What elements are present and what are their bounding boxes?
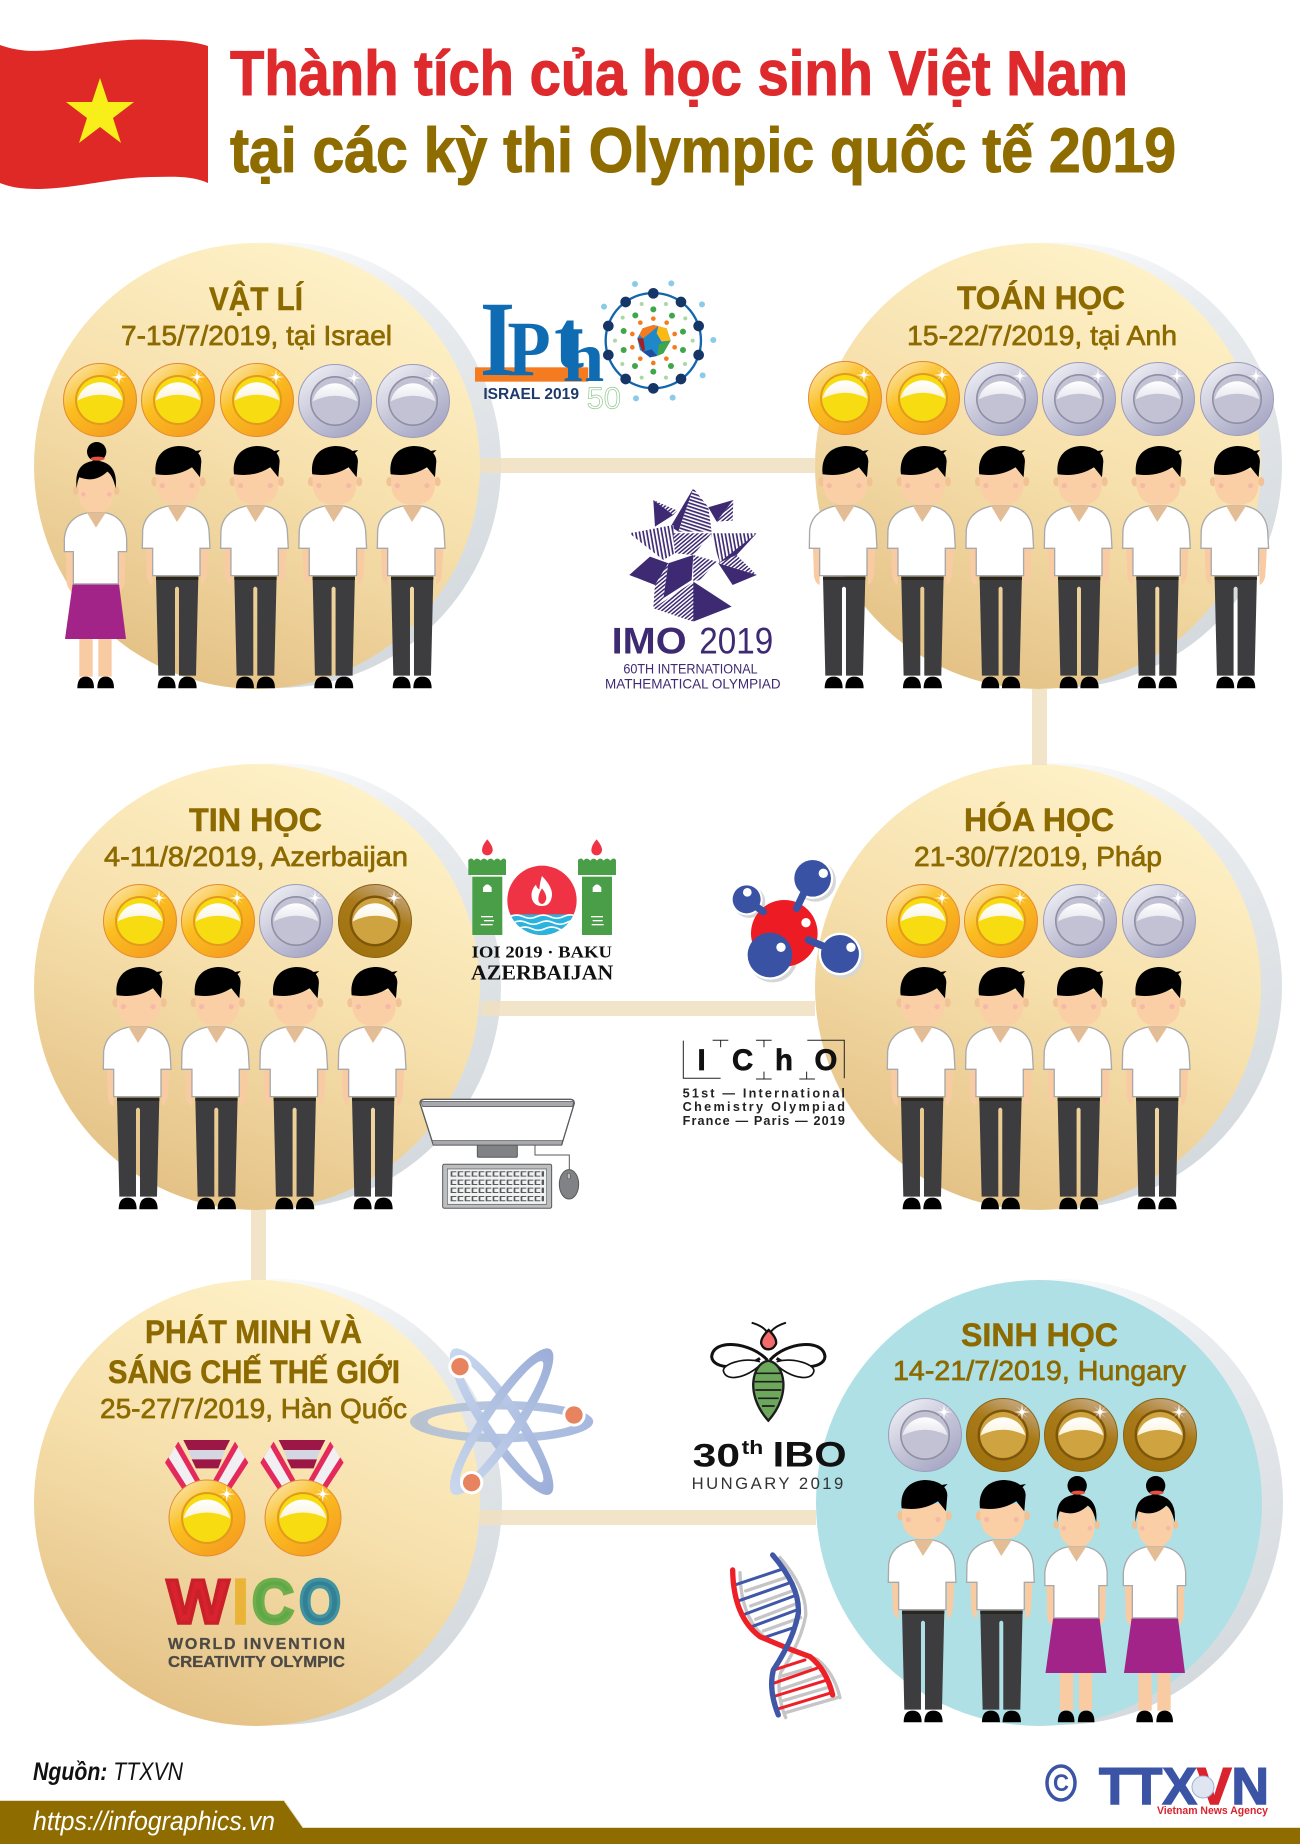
logo: IChO: France — Paris — 2019 [683,1114,845,1128]
heading: Vật lí: VẬT LÍ [209,281,304,317]
logo: IBO Hungary [692,1323,847,1493]
logo: IOI 2019 Baku: IOI 2019 · BAKU [472,943,612,962]
logo: IChO [683,1040,845,1128]
logo: IMO 2019: 60TH INTERNATIONAL [623,660,758,676]
students: Tin học [103,967,406,1209]
flag of Vietnam [0,39,208,189]
students: Vật lí [64,442,445,688]
logo: TTXVN: C [1053,1770,1069,1797]
students: Toán học [809,446,1269,688]
logo: IMO 2019: MATHEMATICAL OLYMPIAD [605,675,781,691]
logo: WICO: CREATIVITY OLYMPIC [168,1654,345,1671]
logo: IOI 2019 Baku: AZERBAIJAN [471,960,614,984]
logo: WICO: I [233,1568,248,1637]
medals: Vật lí [64,364,450,438]
medals: Toán học [808,362,1274,436]
logo: IMO 2019 [605,488,781,691]
logo: IPhO: 50 [587,381,621,415]
logo: IPhO [475,280,716,415]
connectors between panels [251,458,1047,1525]
heading: Phát minh và sáng chế thế giới: SÁNG CHẾ THẾ GIỚI [108,1354,400,1390]
icon: atom [410,1338,593,1506]
panel: Sinh học [816,1279,1283,1726]
heading: Sinh học: SINH HỌC [961,1317,1118,1353]
medals: Sinh học [888,1398,1196,1472]
website url: https://infographics.vn [33,1806,275,1836]
heading: Phát minh và sáng chế thế giới [108,1314,400,1390]
medals: Tin học [104,884,412,958]
logo: IBO Hungary: th [742,1438,763,1459]
date: Vật lí: 7-15/7/2019, tại Israel [121,320,392,351]
logo: IOI 2019 Baku [468,839,616,984]
logo: IBO Hungary: HUNGARY 2019 [692,1474,843,1493]
panel: Tin học [34,763,501,1210]
title [230,39,1176,186]
logo: IChO: h [775,1044,793,1077]
icon: DNA helix [733,1555,840,1718]
logo: IPhO: ISRAEL 2019 [483,386,579,403]
panel: Hóa học [815,763,1282,1210]
icon: computer [420,1099,579,1208]
logo: IPhO: P [507,305,551,392]
heading: Toán học: TOÁN HỌC [957,280,1125,316]
logo: TTXVN: TTXVN [1099,1758,1269,1816]
date: Sinh học: 14-21/7/2019, Hungary [893,1355,1186,1386]
students: Sinh học [888,1476,1186,1722]
medals: Hóa học [886,884,1196,958]
panel: Phát minh và sáng chế thế giới [34,1279,502,1726]
logo: IPhO: h [563,318,604,397]
logo: TTXVN: Vietnam News Agency [1157,1805,1269,1817]
title: tại các kỳ thi Olympic quốc tế 2019 [230,116,1176,186]
logo: IPhO: t [554,294,584,386]
date: Hóa học: 21-30/7/2019, Pháp [914,841,1162,872]
logo: IChO: C [732,1044,753,1077]
logo: IChO: Chemistry Olympiad [683,1100,845,1114]
logo: WICO: WORLD INVENTION [168,1636,345,1653]
logo: IChO: 51st — International [683,1086,845,1100]
logo: IPhO: I [480,281,515,399]
heading: Phát minh và sáng chế thế giới: PHÁT MINH VÀ [145,1314,362,1350]
heading: Tin học: TIN HỌC [189,802,322,838]
heading: Hóa học: HÓA HỌC [964,802,1114,838]
students: Hóa học [887,967,1190,1209]
date: Tin học: 4-11/8/2019, Azerbaijan [104,841,408,872]
date: Toán học: 15-22/7/2019, tại Anh [907,320,1177,351]
footer band [0,1800,1300,1844]
logo: IMO 2019: 2019 [699,620,773,661]
title: Thành tích của học sinh Việt Nam [230,39,1128,109]
panel: Vật lí [34,242,501,689]
logo: WICO: O [299,1568,341,1637]
logo: IChO: I [698,1044,706,1077]
logo: IChO: O [815,1044,837,1077]
logo: WICO: C [252,1568,294,1637]
icon: molecule [731,858,864,982]
logo: WICO [167,1568,345,1671]
logo: WICO: W [167,1568,229,1637]
medals with ribbons [165,1440,344,1556]
logo: IMO 2019: IMO [612,620,687,661]
source note: Nguồn: TTXVN [33,1758,184,1786]
date: Phát minh: 25-27/7/2019, Hàn Quốc [100,1393,407,1424]
logo: IBO Hungary: IBO [773,1436,847,1475]
panel: Toán học [808,242,1282,689]
logo: IBO Hungary: 30 [693,1437,740,1474]
